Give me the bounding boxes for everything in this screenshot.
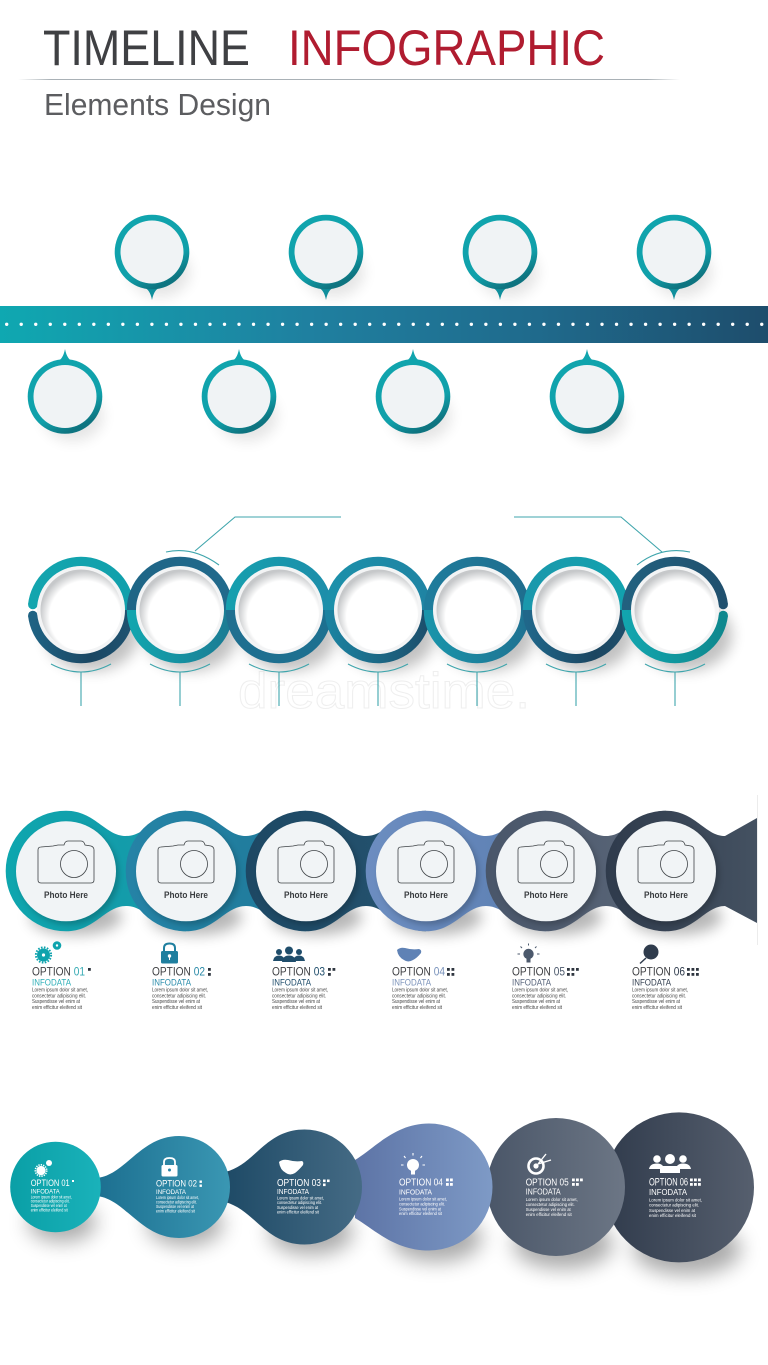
- chain shadows: [30, 899, 722, 935]
- option 06 block: enim efficitur eleifend sit: [632, 1005, 682, 1011]
- title: TIMELINE: [43, 20, 250, 76]
- icon: handshake: [279, 1160, 303, 1174]
- option 05 block: [512, 944, 579, 1011]
- photo placeholder 4: [376, 821, 476, 921]
- circle 6 content: OPTION 06: [649, 1176, 688, 1188]
- circle 2 content: Suspendisse vel enim at: [156, 1204, 195, 1209]
- option 03 block: consectetur adipiscing elit.: [272, 993, 326, 999]
- option 02 block: OPTION 02: [152, 964, 205, 978]
- circle 3 content: Suspendisse vel enim at: [277, 1205, 319, 1210]
- icon: magnifier: [640, 944, 658, 964]
- circle 2 content: enim efficitur eleifend sit: [156, 1208, 196, 1214]
- icon: gears: [36, 941, 61, 963]
- option 03 block: enim efficitur eleifend sit: [272, 1005, 322, 1011]
- icon: light bulb: [401, 1153, 425, 1174]
- photo placeholder 3: Photo Here: [284, 890, 328, 900]
- circle 5 content: [526, 1154, 583, 1217]
- circle 4 content: enim efficitur eleifend sit: [399, 1211, 443, 1216]
- circle 2 content: Lorem ipsum dolor sit amet,: [156, 1195, 199, 1200]
- circle 1 content: enim efficitur eleifend sit: [31, 1208, 68, 1212]
- option 03 block: INFODATA: [272, 978, 312, 988]
- photo disc shadows: [19, 825, 719, 925]
- circle 5 content: Suspendisse vel enim at: [526, 1207, 571, 1212]
- circle 2 content: INFODATA: [156, 1189, 186, 1196]
- chain segment 2: [126, 811, 306, 931]
- timeline 4: growing circles: [10, 1112, 754, 1275]
- option 02 block: [152, 944, 211, 1011]
- option 03 block: [272, 946, 335, 1011]
- option 01 block: [32, 941, 91, 1011]
- timeline 3: photo chain: [6, 795, 758, 945]
- ring discs: [37, 566, 719, 654]
- option 02 block: Suspendisse vel enim at: [152, 999, 200, 1005]
- option 04 block: INFODATA: [392, 978, 432, 988]
- ring end caps: [28, 600, 728, 620]
- photo placeholder 1: Photo Here: [44, 890, 88, 900]
- circle 3 content: enim efficitur eleifend sit: [277, 1210, 320, 1215]
- bottom pin 3: [376, 349, 451, 441]
- circle 2: [96, 1136, 230, 1238]
- option 03 block: OPTION 03: [272, 964, 325, 978]
- option 01 block: consectetur adipiscing elit.: [32, 993, 86, 999]
- photo placeholder 6: Photo Here: [644, 890, 688, 900]
- option 06 block: [632, 944, 699, 1011]
- option 06 block: Suspendisse vel enim at: [632, 999, 680, 1005]
- timeline 1: pins and dotted band: [0, 215, 768, 441]
- circle 5 content: consectetur adipiscing elit.: [526, 1202, 575, 1207]
- subtitle: Elements Design: [44, 87, 271, 122]
- chain segment 6: [606, 811, 757, 931]
- photo placeholder 6: [616, 821, 716, 921]
- icon: people: [273, 946, 305, 962]
- photo placeholder 3: [256, 821, 356, 921]
- circle 3 content: OPTION 03: [277, 1178, 321, 1189]
- circle 6 content: Lorem ipsum dolor sit amet,: [649, 1198, 702, 1204]
- top pin 4: [637, 215, 712, 300]
- option 03 block: Lorem ipsum dolor sit amet,: [272, 988, 328, 994]
- option 04 block: Suspendisse vel enim at: [392, 999, 440, 1005]
- top pin 2: [289, 215, 364, 300]
- circle 4: [355, 1124, 492, 1250]
- circle 4 content: Suspendisse vel enim at: [399, 1206, 442, 1211]
- chain segment 3: [246, 811, 426, 931]
- chain segment 1: [6, 811, 186, 931]
- photo placeholder 1: [16, 821, 116, 921]
- option 04 block: consectetur adipiscing elit.: [392, 993, 446, 999]
- option 04 block: [392, 948, 454, 1011]
- icon: people: [649, 1154, 691, 1173]
- option 04 block: OPTION 04: [392, 964, 445, 978]
- option 01 block: enim efficitur eleifend sit: [32, 1005, 82, 1011]
- option 02 block: INFODATA: [152, 978, 192, 988]
- circle 2 content: [156, 1158, 202, 1214]
- option 01 block: Lorem ipsum dolor sit amet,: [32, 988, 88, 994]
- circle 5: [487, 1118, 625, 1256]
- circle 6: [604, 1112, 754, 1262]
- option 05 block: Suspendisse vel enim at: [512, 999, 560, 1005]
- photo placeholder 4: Photo Here: [404, 890, 448, 900]
- circle 4 content: OPTION 04: [399, 1178, 443, 1188]
- circle 5 content: INFODATA: [526, 1188, 561, 1196]
- circle 4 content: [399, 1153, 453, 1216]
- top pin 3: [463, 215, 538, 300]
- chain segment 5: [486, 811, 666, 931]
- option 06 block: consectetur adipiscing elit.: [632, 993, 686, 999]
- title: [43, 20, 605, 76]
- bottom pin 1: [28, 349, 103, 441]
- circle 5 content: Lorem ipsum dolor sit amet,: [526, 1197, 578, 1202]
- option 05 block: INFODATA: [512, 978, 552, 988]
- circle 5 content: enim efficitur eleifend sit: [526, 1212, 572, 1217]
- circle 2 content: consectetur adipiscing elit.: [156, 1200, 197, 1204]
- circle 3 content: INFODATA: [277, 1187, 309, 1196]
- circle 1 content: [31, 1160, 74, 1212]
- circle 1 content: Suspendisse vel enim at: [31, 1203, 67, 1208]
- icon: padlock: [162, 1158, 178, 1176]
- circle 6 content: [649, 1154, 702, 1219]
- chain segment 4: [366, 811, 546, 931]
- circle 1 content: Lorem ipsum dolor sit amet,: [31, 1194, 72, 1199]
- option 05 block: enim efficitur eleifend sit: [512, 1005, 562, 1011]
- circle shadows: [28, 1202, 741, 1275]
- bottom pin 2: [202, 349, 277, 441]
- dotted band: [0, 306, 768, 343]
- photo placeholder 5: Photo Here: [524, 890, 568, 900]
- option 06 block: INFODATA: [632, 978, 672, 988]
- ring arcs: [33, 562, 723, 659]
- option 06 block: OPTION 06: [632, 964, 685, 978]
- circle 6 content: consectetur adipiscing elit.: [649, 1203, 699, 1209]
- ring shadows: [46, 599, 732, 671]
- icon: light bulb: [518, 944, 540, 962]
- photo placeholder 5: [496, 821, 596, 921]
- bottom pin 4: [550, 349, 625, 441]
- ring connector lines: [51, 517, 705, 706]
- icon: handshake: [397, 948, 421, 962]
- option 02 block: consectetur adipiscing elit.: [152, 993, 206, 999]
- option 05 block: OPTION 05: [512, 964, 565, 978]
- circle 3 content: Lorem ipsum dolor sit amet,: [277, 1196, 324, 1200]
- option 05 block: Lorem ipsum dolor sit amet,: [512, 988, 568, 994]
- circle 1 content: INFODATA: [31, 1188, 60, 1196]
- circle 3: [225, 1130, 362, 1244]
- circle 6 content: enim efficitur eleifend sit: [649, 1213, 697, 1219]
- title: INFOGRAPHIC: [288, 20, 605, 76]
- icon: padlock: [161, 944, 178, 964]
- circle 4 content: INFODATA: [399, 1188, 433, 1196]
- option 02 block: Lorem ipsum dolor sit amet,: [152, 988, 208, 994]
- circle 6 content: INFODATA: [649, 1188, 688, 1197]
- option 04 block: enim efficitur eleifend sit: [392, 1005, 442, 1011]
- watermark: dreamstime.: [238, 663, 530, 719]
- circle 1 content: consectetur adipiscing elit.: [31, 1199, 70, 1204]
- option 05 block: consectetur adipiscing elit.: [512, 993, 566, 999]
- top pin 1: [115, 215, 190, 300]
- option 01 block: Suspendisse vel enim at: [32, 999, 80, 1005]
- circle 4 content: Lorem ipsum dolor sit amet,: [399, 1196, 447, 1202]
- option 06 block: Lorem ipsum dolor sit amet,: [632, 988, 688, 994]
- icon: target with arrows: [528, 1154, 551, 1174]
- circle 1: [10, 1142, 101, 1232]
- circle 3 content: consectetur adipiscing elit.: [277, 1200, 322, 1205]
- icon: gears: [35, 1160, 52, 1176]
- circle 1 content: OPTION 01: [31, 1178, 70, 1188]
- option 02 block: enim efficitur eleifend sit: [152, 1005, 202, 1011]
- circle 4 content: consectetur adipiscing elit.: [399, 1201, 445, 1206]
- timeline 2: interlocked rings: [28, 517, 732, 706]
- photo placeholder 2: Photo Here: [164, 890, 208, 900]
- circle 2 content: OPTION 02: [156, 1178, 197, 1188]
- circle 5 content: OPTION 05: [526, 1178, 569, 1188]
- photo placeholder 2: [136, 821, 236, 921]
- option 01 block: OPTION 01: [32, 964, 85, 978]
- option 04 block: Lorem ipsum dolor sit amet,: [392, 988, 448, 994]
- circle 3 content: [277, 1160, 330, 1215]
- circle 6 content: Suspendisse vel enim at: [649, 1208, 696, 1214]
- option 01 block: INFODATA: [32, 978, 72, 988]
- option 03 block: Suspendisse vel enim at: [272, 999, 320, 1005]
